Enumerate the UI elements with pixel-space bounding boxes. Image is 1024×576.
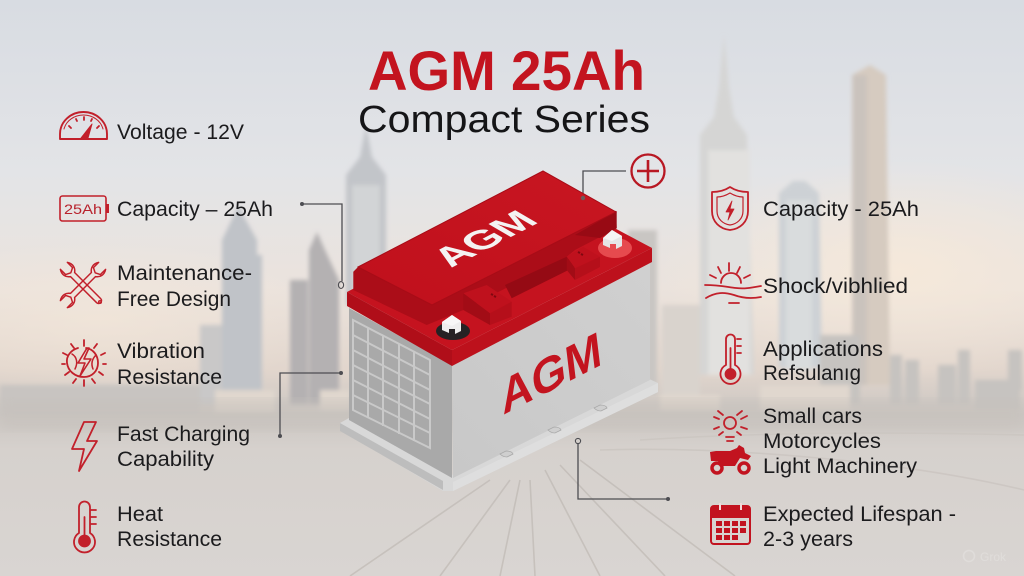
icon: plus <box>632 154 664 188</box>
icon: calendar <box>711 503 750 544</box>
icon: motorcycle <box>710 445 751 473</box>
text: fast charging: Capability <box>117 448 215 471</box>
road <box>350 433 1024 576</box>
watermark: Grok <box>980 550 1007 564</box>
text: applications: Refsulanıg <box>763 362 861 385</box>
battery left face with grid <box>349 308 452 478</box>
text: lifespan <box>763 503 956 551</box>
text: shock: Shock/vibhlied <box>763 275 908 298</box>
text: applications <box>763 338 883 385</box>
icon: battery 25Ah: 25Ah <box>64 201 102 217</box>
text: heat: Heat <box>117 503 163 526</box>
text: maintenance: Maintenance- <box>117 262 252 285</box>
text: capacity: Capacity – 25Ah <box>117 198 273 221</box>
icon: thermometer <box>74 502 96 552</box>
icon: lightning bolt <box>72 422 97 471</box>
text: applications list <box>763 405 918 478</box>
text: maintenance: Free Design <box>117 288 231 311</box>
battery lid <box>353 171 617 325</box>
icon: battery 25Ah <box>60 196 109 221</box>
text: lifespan: 2-3 years <box>763 528 853 551</box>
icon: vibration burst <box>62 340 106 386</box>
icon: sun over waves <box>705 263 761 303</box>
text: vibration: Resistance <box>117 366 222 389</box>
text: heat <box>117 503 222 551</box>
battery <box>340 171 658 491</box>
text: lifespan: Expected Lifespan - <box>763 503 956 526</box>
icon: crossed wrenches <box>59 261 107 309</box>
icon: shield <box>712 187 748 230</box>
battery lid: AGM <box>421 205 547 272</box>
title <box>358 39 650 141</box>
battery right face: AGM <box>498 321 604 425</box>
right column <box>705 187 956 551</box>
positive terminal <box>598 230 632 258</box>
text: applications: Applications <box>763 338 883 361</box>
icon: sun bulb <box>714 411 747 441</box>
text: fast charging <box>117 423 250 471</box>
left column <box>59 112 273 552</box>
text: applications list: Light Machinery <box>763 455 918 478</box>
battery base <box>340 378 658 491</box>
title: AGM 25Ah <box>368 39 645 102</box>
text: applications list: Motorcycles <box>763 430 881 453</box>
watermark <box>964 550 1007 564</box>
text: vibration: Vibration <box>117 340 205 363</box>
battery flange <box>347 190 652 366</box>
battery right face <box>452 262 650 478</box>
battery handle recess and blocks <box>463 247 600 325</box>
icon: thermometer <box>721 334 741 384</box>
connector lines <box>278 171 670 501</box>
open connector markers <box>338 282 581 444</box>
title: Compact Series <box>358 99 650 141</box>
text: fast charging: Fast Charging <box>117 423 250 446</box>
text: capacity: Capacity - 25Ah <box>763 198 919 221</box>
text: maintenance <box>117 262 252 311</box>
text: applications list: Small cars <box>763 405 862 428</box>
icon: gauge <box>60 112 107 139</box>
text: vibration <box>117 340 222 389</box>
text: heat: Resistance <box>117 528 222 551</box>
text: voltage: Voltage - 12V <box>117 121 244 144</box>
negative terminal <box>436 315 470 340</box>
